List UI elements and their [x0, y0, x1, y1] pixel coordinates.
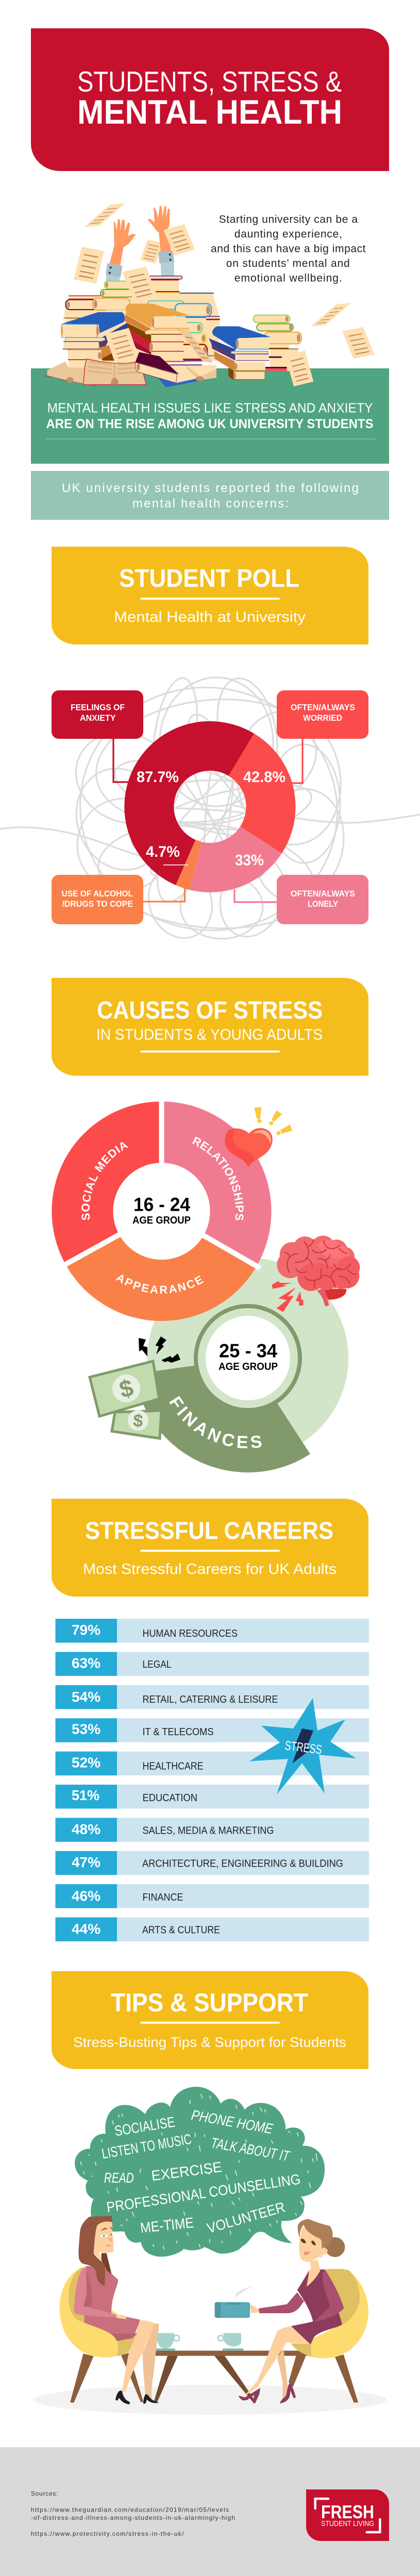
tip: exercise: EXERCISE: [150, 2159, 223, 2184]
panel: reported concerns: [31, 471, 389, 520]
band line two: ARE ON THE RISE AMONG UK UNIVERSITY STUDENTS: [46, 417, 373, 431]
row: retail: RETAIL, CATERING & LEISURE: [142, 1693, 278, 1705]
row: human resources: HUMAN RESOURCES: [142, 1628, 238, 1639]
books open right: [158, 364, 216, 387]
careers subtitle: Most Stressful Careers for UK Adults: [83, 1561, 337, 1578]
tip: talk about it: TALK ABOUT IT: [210, 2134, 291, 2164]
value: 87.7%: 87.7%: [137, 769, 179, 786]
sources text: [31, 2490, 235, 2537]
table and first woman: [60, 2216, 326, 2404]
row: finance: 46%: [72, 1888, 100, 1904]
title line one: STUDENTS, STRESS &: [77, 65, 342, 98]
label: alcohol: USE OF ALCOHOL: [62, 889, 133, 899]
logo: fresh student living: FRESH: [321, 2501, 374, 2522]
finances label: FINANCES: [169, 1396, 262, 1449]
tip: socialise: SOCIALISE: [113, 2114, 176, 2139]
woman left: [74, 2216, 159, 2404]
row: sales: SALES, MEDIA & MARKETING: [142, 1825, 274, 1837]
logo: fresh student living: [306, 2489, 389, 2541]
icon: paper flying right: [311, 303, 351, 327]
icon: money bills: [90, 1361, 161, 1438]
second woman: [215, 2219, 368, 2403]
floor shadow: [34, 2385, 387, 2415]
row: finance: [56, 1884, 369, 1908]
books open centre: [83, 359, 146, 385]
table: [154, 2351, 326, 2402]
footer panel: [0, 2447, 420, 2576]
icon: black sparks: [139, 1336, 180, 1363]
sources text: https://www.protectivity.com/stress-in-the-uk/: [31, 2530, 184, 2537]
connector: alcohol: [143, 888, 184, 902]
row: arts: 44%: [72, 1921, 100, 1937]
label: feelings of anxiety: [52, 690, 143, 739]
concerns line two: mental health concerns:: [132, 497, 289, 511]
tips subtitle: Stress-Busting Tips & Support for Students: [73, 2035, 346, 2050]
books centre stack: [125, 303, 189, 362]
icon: paper far right: [342, 327, 375, 359]
woman right: [239, 2219, 345, 2403]
tip: read: READ: [104, 2170, 134, 2186]
intro text: [211, 213, 366, 284]
age group caption: AGE GROUP: [132, 1215, 191, 1226]
illustration: arms and books left pile: [45, 203, 220, 387]
sources text: https://www.theguardian.com/education/2019/mar/05/levels: [31, 2506, 229, 2513]
row: education: 51%: [72, 1787, 99, 1803]
bill one: [90, 1361, 159, 1416]
row: finance: FINANCE: [142, 1891, 183, 1903]
row: healthcare: HEALTHCARE: [142, 1760, 203, 1772]
relationships label: RELATIONSHIPS: [192, 1137, 243, 1221]
books open left: [45, 362, 96, 386]
tip: me-time: ME-TIME: [140, 2214, 194, 2236]
social media label: SOCIAL MEDIA: [81, 1142, 128, 1220]
heading: stressful careers: [52, 1499, 368, 1597]
label: often worried: [277, 690, 368, 739]
tip: phone home: PHONE HOME: [190, 2107, 274, 2137]
books back stack right: [148, 276, 220, 361]
icon: paper upper right: [163, 224, 195, 256]
row: architecture: 47%: [72, 1854, 100, 1870]
segment: social media: [52, 1101, 162, 1264]
heading: tips and support: [52, 1971, 368, 2069]
icon: red sparks: [272, 1281, 304, 1312]
row: it: [56, 1718, 369, 1742]
row: retail: 54%: [72, 1689, 100, 1705]
logo: fresh student living: STUDENT LIVING: [321, 2519, 374, 2528]
wheel: 16-24 age group: [52, 1101, 271, 1321]
row: retail: [56, 1685, 369, 1709]
row: human resources: 79%: [72, 1622, 100, 1638]
title line two: MENTAL HEALTH: [77, 93, 342, 131]
band line one: MENTAL HEALTH ISSUES LIKE STRESS AND ANXIETY: [47, 400, 373, 415]
label: alcohol: [52, 875, 143, 924]
row: healthcare: [56, 1752, 369, 1775]
segment: appearance: [65, 1211, 257, 1321]
heading: causes of stress: [52, 978, 368, 1076]
icon: cup right: [218, 2333, 243, 2351]
causes subtitle: IN STUDENTS & YOUNG ADULTS: [96, 1026, 323, 1043]
table: stressful careers: [56, 1619, 369, 1941]
segment: alcohol: [176, 840, 201, 890]
label: alcohol: /DRUGS TO COPE: [62, 900, 133, 909]
bill two: [112, 1411, 161, 1438]
appearance label: APPEARANCE: [115, 1275, 204, 1294]
tip: professional counselling: PROFESSIONAL COUNSELLING: [106, 2171, 301, 2215]
row: legal: LEGAL: [142, 1658, 171, 1670]
icon: paper left: [74, 247, 104, 284]
row: it: IT & TELECOMS: [142, 1726, 213, 1738]
icon: cup left: [156, 2333, 179, 2351]
icon: tissue box: [215, 2286, 254, 2318]
books pile filler: [64, 292, 220, 367]
scribble background: [0, 664, 420, 954]
segment: relationships: [162, 1101, 272, 1266]
label: often worried: WORRIED: [303, 714, 342, 723]
icon: heart: [225, 1128, 273, 1167]
books left stack: [61, 281, 133, 370]
label: feelings of anxiety: ANXIETY: [80, 714, 115, 723]
age 16-24: 16 - 24: [133, 1194, 190, 1215]
causes title: CAUSES OF STRESS: [97, 997, 323, 1024]
title banner: [31, 28, 389, 171]
row: sales: 48%: [72, 1821, 100, 1837]
icon: paper lower: [105, 328, 139, 363]
intro text: on students’ mental and: [226, 258, 350, 269]
tip: listen to music: LISTEN TO MUSIC: [100, 2131, 193, 2162]
row: architecture: [56, 1851, 369, 1875]
sources text: Sources:: [31, 2490, 58, 2497]
icon: money bills: $: [132, 1411, 144, 1431]
illustration: books right pile: [209, 303, 375, 386]
icon: stress star: [249, 1698, 356, 1794]
intro text: and this can have a big impact: [211, 243, 366, 255]
row: sales: [56, 1818, 369, 1842]
concerns line one: UK university students reported the following: [62, 481, 359, 495]
segment: lonely: [190, 826, 282, 892]
row: architecture: ARCHITECTURE, ENGINEERING & BUILDING: [142, 1857, 343, 1869]
icon: brain: [277, 1235, 360, 1306]
icon: money bills: $: [116, 1374, 136, 1403]
intro text: emotional wellbeing.: [234, 272, 342, 284]
value: 42.8%: 42.8%: [243, 769, 285, 786]
icon: left arm: [106, 219, 136, 282]
icon: paper flat: [179, 330, 213, 363]
intro text: Starting university can be a: [219, 213, 358, 225]
student poll title: STUDENT POLL: [119, 565, 299, 592]
careers title: STRESSFUL CAREERS: [85, 1517, 333, 1544]
icon: flying paper: [84, 203, 125, 227]
sources text: -of-distress-and-illness-among-students-in-uk-alarmingly-high: [31, 2514, 235, 2521]
row: arts: [56, 1918, 369, 1941]
segment: finances: [135, 1358, 310, 1472]
panel: green band: [31, 368, 389, 464]
label: feelings of anxiety: FEELINGS OF: [71, 703, 125, 713]
speech cloud: [75, 2087, 325, 2257]
row: legal: 63%: [72, 1655, 100, 1671]
heading: student poll: [52, 547, 368, 645]
chair right: [289, 2269, 368, 2402]
segment: anxiety: [124, 721, 254, 885]
icon: small paper: [140, 240, 163, 264]
age 25-34: 25 - 34: [219, 1341, 277, 1361]
chair left: [60, 2267, 143, 2402]
value: 4.7%: 4.7%: [146, 843, 180, 860]
icon: right arm: [147, 206, 174, 276]
label: often lonely: LONELY: [308, 900, 338, 909]
label: often lonely: OFTEN/ALWAYS: [291, 889, 355, 899]
tips title: TIPS & SUPPORT: [111, 1988, 308, 2017]
books maroon: [135, 352, 179, 383]
icon: paper on green: [285, 351, 313, 386]
label: often worried: OFTEN/ALWAYS: [291, 703, 355, 713]
row: it: 53%: [72, 1721, 100, 1737]
row: education: EDUCATION: [142, 1792, 197, 1804]
intro text: daunting experience,: [234, 228, 342, 240]
wheel: 25-34 age group: [143, 1258, 348, 1472]
books right back stack: [254, 315, 301, 371]
books right front stack: [209, 326, 271, 380]
value: 33%: 33%: [235, 852, 264, 869]
age group caption: AGE GROUP: [219, 1361, 278, 1372]
segment: worried: [229, 734, 295, 853]
row: arts: ARTS & CULTURE: [142, 1924, 220, 1936]
connector: anxiety: [113, 739, 128, 782]
connector: lonely: [234, 889, 277, 902]
row: human resources: [56, 1619, 369, 1642]
connector: worried: [292, 739, 303, 783]
icon: stress star: STRESS: [284, 1738, 323, 1757]
student poll subtitle: Mental Health at University: [114, 609, 306, 625]
label: often lonely: [277, 875, 368, 924]
icons: heart and brain: [225, 1107, 360, 1312]
icon: exclamation marks: [254, 1107, 292, 1135]
tip: volunteer: VOLUNTEER: [205, 2199, 287, 2236]
icon: paper centre: [122, 266, 158, 302]
donut chart: [124, 721, 295, 892]
row: healthcare: 52%: [72, 1755, 100, 1770]
row: education: [56, 1785, 369, 1808]
row: legal: [56, 1652, 369, 1676]
